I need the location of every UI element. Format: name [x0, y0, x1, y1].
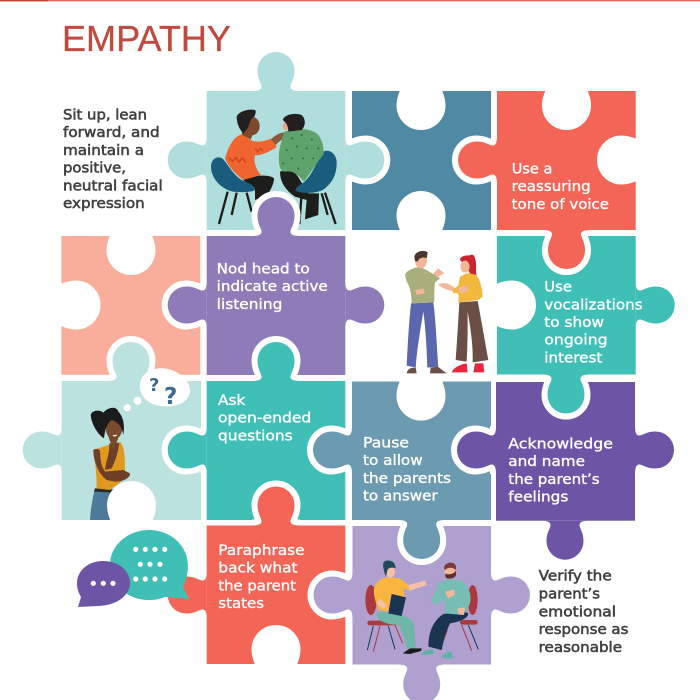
text: vocalizations: vocalizations [544, 298, 643, 314]
text: pause: Pause [363, 435, 409, 451]
text: acknowledge [508, 436, 613, 506]
text: pause: the parents [363, 471, 451, 487]
text: sit up, lean forward: positive, [63, 161, 126, 177]
text: ask open-ended questions: open-ended [218, 411, 311, 427]
panel: dark purple puzzle piece, acknowledge [457, 382, 674, 560]
panel: purple puzzle piece, nod head [168, 197, 384, 375]
icon: speech bubbles [77, 530, 189, 607]
text: reassuring tone [512, 161, 609, 213]
text: sit up, lean forward: expression [63, 196, 145, 212]
text: paraphrase [218, 543, 305, 612]
text: acknowledge: the parent’s [508, 472, 600, 488]
panel: lilac puzzle piece with counselling scene [314, 526, 530, 700]
text: verify: Verify the [539, 569, 612, 585]
panel: teal puzzle piece, ask questions [168, 342, 345, 520]
text: acknowledge: feelings [508, 490, 568, 506]
icon: thought bubble with question marks: ? [149, 375, 159, 396]
text: acknowledge: and name [508, 454, 585, 470]
panel: pale teal puzzle piece with thinking woman [23, 342, 201, 526]
panel: blue-grey puzzle piece, pause [313, 376, 491, 559]
text: pause: to answer [363, 489, 438, 505]
text: vocalizations: interest [544, 351, 603, 367]
text: paraphrase: the parent [218, 578, 296, 594]
text: verify: emotional [539, 604, 616, 620]
text: nod head [217, 261, 328, 313]
text: reassuring tone: reassuring [512, 179, 591, 195]
panel: peach puzzle piece [56, 230, 200, 375]
icon: thought bubble with question marks [124, 368, 190, 411]
text: ask open-ended questions: questions [218, 428, 293, 444]
panel: coral puzzle piece, reassuring tone [458, 85, 642, 269]
text: reassuring tone: Use a [512, 161, 552, 177]
text: vocalizations: ongoing [544, 333, 608, 349]
text: sit up, lean forward: neutral facial [63, 178, 163, 194]
panel: light teal puzzle piece with seated pair [168, 52, 384, 230]
illustration: woman and man seated in conversation [365, 561, 478, 658]
text: nod head: Nod head to [217, 261, 310, 277]
text: vocalizations: Use [544, 280, 572, 296]
text: paraphrase: back what [218, 561, 298, 577]
text: sit up, lean forward: Sit up, lean [63, 108, 147, 124]
panel: teal puzzle piece, vocalizations [491, 236, 675, 414]
text: sit up, lean forward: forward, and [63, 125, 160, 141]
text: nod head: indicate active [217, 279, 328, 295]
text: pause: to allow [363, 453, 423, 469]
text: sit up, lean forward: maintain a [63, 143, 144, 159]
title: EMPATHY [62, 18, 231, 59]
text: paraphrase: Paraphrase [218, 543, 305, 559]
text: ask open-ended questions [218, 393, 311, 444]
icon: thought bubble with question marks: ? [164, 384, 177, 410]
text: vocalizations [544, 280, 643, 367]
text: verify: response as [539, 622, 628, 638]
text: sit up, lean forward [63, 108, 163, 212]
text: paraphrase: states [218, 596, 264, 612]
illustration: thinking woman [90, 408, 130, 520]
text: nod head: listening [217, 297, 282, 313]
text: vocalizations: to show [544, 315, 604, 331]
text: pause [363, 435, 451, 505]
text: verify: parent’s [539, 586, 600, 602]
text: verify: reasonable [539, 640, 622, 656]
illustration: standing man and woman talking [405, 251, 488, 373]
panel: coral puzzle piece, paraphrase [168, 486, 345, 670]
panel: dark blue puzzle piece [352, 85, 491, 236]
text: verify [539, 569, 628, 656]
illustration: two people seated, one comforting [211, 110, 337, 224]
text: reassuring tone: tone of voice [512, 197, 609, 213]
text: ask open-ended questions: Ask [218, 393, 246, 409]
text: acknowledge: Acknowledge [508, 436, 613, 452]
